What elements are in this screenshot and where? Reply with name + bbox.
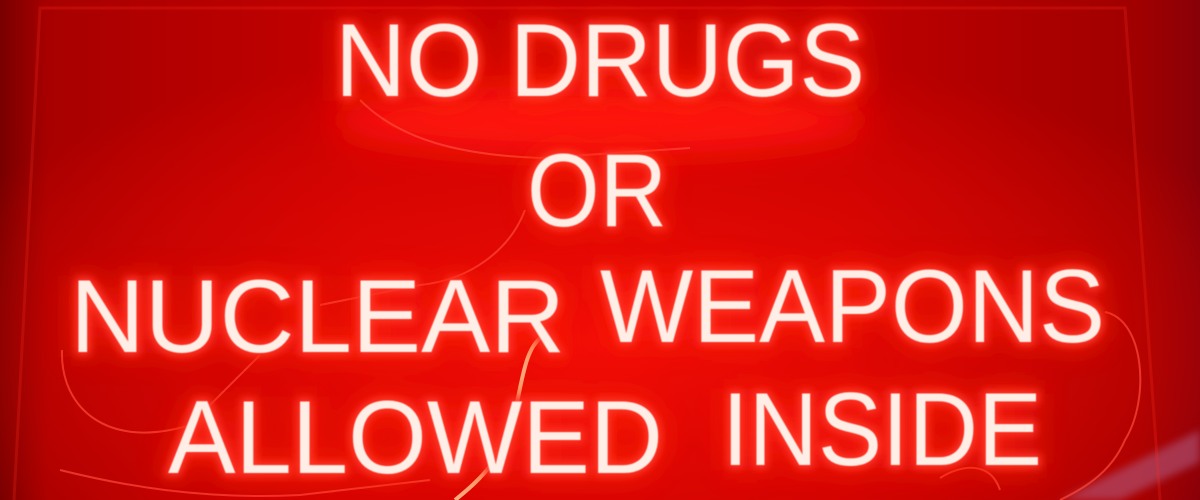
middle glow of neon letters: ALLOWED [168,380,663,496]
middle glow of neon letters: WEAPONS [600,249,1105,365]
line 2: OR [527,133,667,249]
line 4 right: INSIDE [722,372,1042,488]
middle glow of neon letters: NO DRUGS [335,3,865,119]
line 4 left: ALLOWED [168,380,663,496]
warm wire [455,335,545,500]
outer glow of neon letters: OR [527,133,667,249]
wires behind the tubes [60,100,1140,500]
outer glow of neon letters: WEAPONS [600,249,1105,365]
middle glow of neon letters: NUCLEAR [70,259,565,375]
middle glow of neon letters: INSIDE [722,372,1042,488]
line 3 right: WEAPONS [600,249,1105,365]
outer glow of neon letters: INSIDE [722,372,1042,488]
outer glow of neon letters: NO DRUGS [335,3,865,119]
middle glow of neon letters: OR [527,133,667,249]
outer glow of neon letters: ALLOWED [168,380,663,496]
line 1: NO DRUGS [335,3,865,119]
outer glow of neon letters: NUCLEAR [70,259,565,375]
line 3 left: NUCLEAR [70,259,565,375]
